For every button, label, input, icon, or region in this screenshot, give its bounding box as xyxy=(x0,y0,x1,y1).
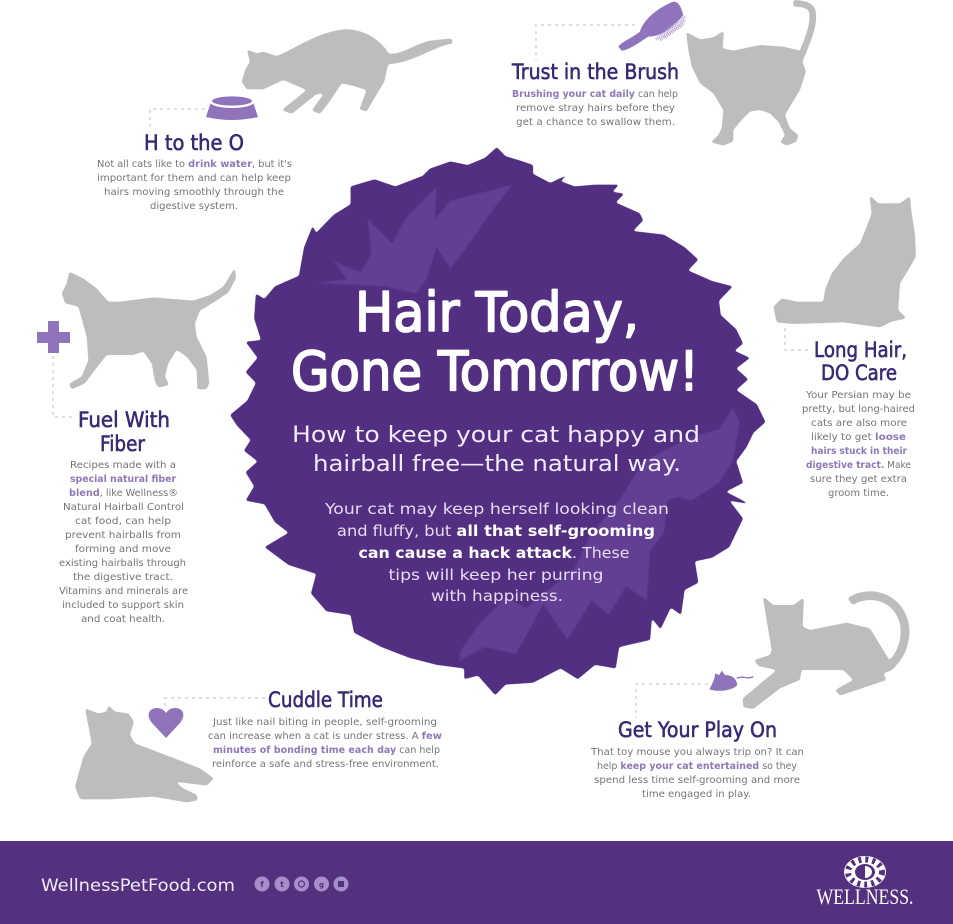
body text: Just like nail biting in people, self-grooming xyxy=(212,717,437,728)
long-haired cat silhouette xyxy=(773,195,916,327)
main title xyxy=(291,281,699,403)
panel: H to the O xyxy=(97,29,453,212)
body text: Brushing your cat daily can help xyxy=(512,89,678,100)
body text: Natural Hairball Control xyxy=(63,502,184,513)
panel: Fuel With Fiber xyxy=(37,267,236,625)
body text xyxy=(590,747,804,800)
intro paragraph: with happiness. xyxy=(431,587,563,605)
body text: the digestive tract. xyxy=(73,572,173,583)
icon: brush xyxy=(618,2,685,51)
social icons: t xyxy=(280,880,284,889)
body text: hairs stuck in their xyxy=(811,446,907,457)
icon: plus xyxy=(37,321,70,353)
body text: pretty, but long-haired xyxy=(802,404,915,415)
panel: Trust in the Brush xyxy=(511,2,813,146)
body text: likely to get loose xyxy=(811,432,906,443)
body text xyxy=(97,159,292,212)
body text: cats are also more xyxy=(811,418,907,429)
heading: DO Care xyxy=(821,361,897,385)
heading: Long Hair, xyxy=(814,338,907,362)
main title: Gone Tomorrow! xyxy=(291,340,699,403)
body text: included to support skin xyxy=(62,600,184,611)
body text: reinforce a safe and stress-free environment. xyxy=(212,759,439,770)
main title: Hair Today, xyxy=(355,281,639,344)
website address: WellnessPetFood.com xyxy=(41,876,235,896)
icon: heart xyxy=(149,708,183,738)
heading: H to the O xyxy=(144,131,244,155)
body text: existing hairballs through xyxy=(59,558,186,569)
body text: and coat health. xyxy=(81,614,165,625)
intro paragraph: can cause a hack attack . These xyxy=(358,544,630,562)
Wellness logo xyxy=(816,856,914,909)
footer band xyxy=(0,841,953,924)
body text: digestive system. xyxy=(150,201,238,212)
body text: forming and move xyxy=(75,544,171,555)
body text: cat food, can help xyxy=(75,516,171,527)
body text: Recipes made with a xyxy=(70,460,176,471)
heading: Cuddle Time xyxy=(268,688,383,712)
heading: Fiber xyxy=(100,432,145,456)
playing cat silhouette xyxy=(743,596,905,709)
body text: digestive tract. Make xyxy=(806,460,911,471)
heading xyxy=(78,408,170,456)
body text: Not all cats like to drink water, but it's xyxy=(97,159,292,170)
intro paragraph: and fluffy, but all that self-grooming xyxy=(337,522,655,540)
Wellness logo: WELLNESS. xyxy=(816,884,914,909)
body text: special natural fiber xyxy=(70,474,176,485)
subtitle: How to keep your cat happy and xyxy=(292,422,700,448)
body text: Your Persian may be xyxy=(805,390,911,401)
body text xyxy=(512,89,678,128)
intro paragraph xyxy=(324,500,669,605)
body text: groom time. xyxy=(828,488,889,499)
intro paragraph: Your cat may keep herself looking clean xyxy=(324,500,669,518)
body text: important for them and can help keep xyxy=(97,173,291,184)
body text: blend, like Wellness® xyxy=(69,488,178,499)
central fur blob panel xyxy=(230,147,766,695)
body text xyxy=(208,717,442,770)
body text xyxy=(802,390,915,499)
body text: help keep your cat entertained so they xyxy=(597,761,797,772)
body text: remove stray hairs before they xyxy=(516,103,675,114)
panel: Get Your Play On xyxy=(590,596,905,800)
body text: Vitamins and minerals are xyxy=(59,586,188,597)
body text: time engaged in play. xyxy=(642,789,751,800)
standing cat silhouette xyxy=(686,3,813,146)
panel: Cuddle Time xyxy=(75,688,442,802)
body text: can increase when a cat is under stress. A few xyxy=(208,731,442,742)
body text: minutes of bonding time each day can help xyxy=(213,745,440,756)
subtitle xyxy=(292,422,700,477)
subtitle: hairball free—the natural way. xyxy=(313,451,681,477)
icon: toy mouse xyxy=(709,671,753,691)
body text: sure they get extra xyxy=(810,474,907,485)
heading: Fuel With xyxy=(78,408,170,432)
body text: hairs moving smoothly through the xyxy=(104,187,284,198)
body text: spend less time self-grooming and more xyxy=(594,775,800,786)
body text: prevent hairballs from xyxy=(65,530,181,541)
body text: That toy mouse you always trip on? It can xyxy=(590,747,804,758)
panel: Long Hair, DO Care xyxy=(773,195,916,499)
icon: water bowl xyxy=(206,96,258,120)
heading xyxy=(814,338,907,385)
walking cat silhouette xyxy=(62,267,236,389)
lying cat silhouette xyxy=(75,705,214,802)
heading: Get Your Play On xyxy=(618,718,777,742)
social icons: g xyxy=(319,881,324,889)
body text: get a chance to swallow them. xyxy=(516,117,675,128)
cat drinking silhouette xyxy=(242,29,453,114)
social icons: f xyxy=(260,880,264,889)
body text xyxy=(59,460,188,625)
intro paragraph: tips will keep her purring xyxy=(388,566,604,584)
social icons xyxy=(254,876,348,892)
heading: Trust in the Brush xyxy=(511,60,679,84)
